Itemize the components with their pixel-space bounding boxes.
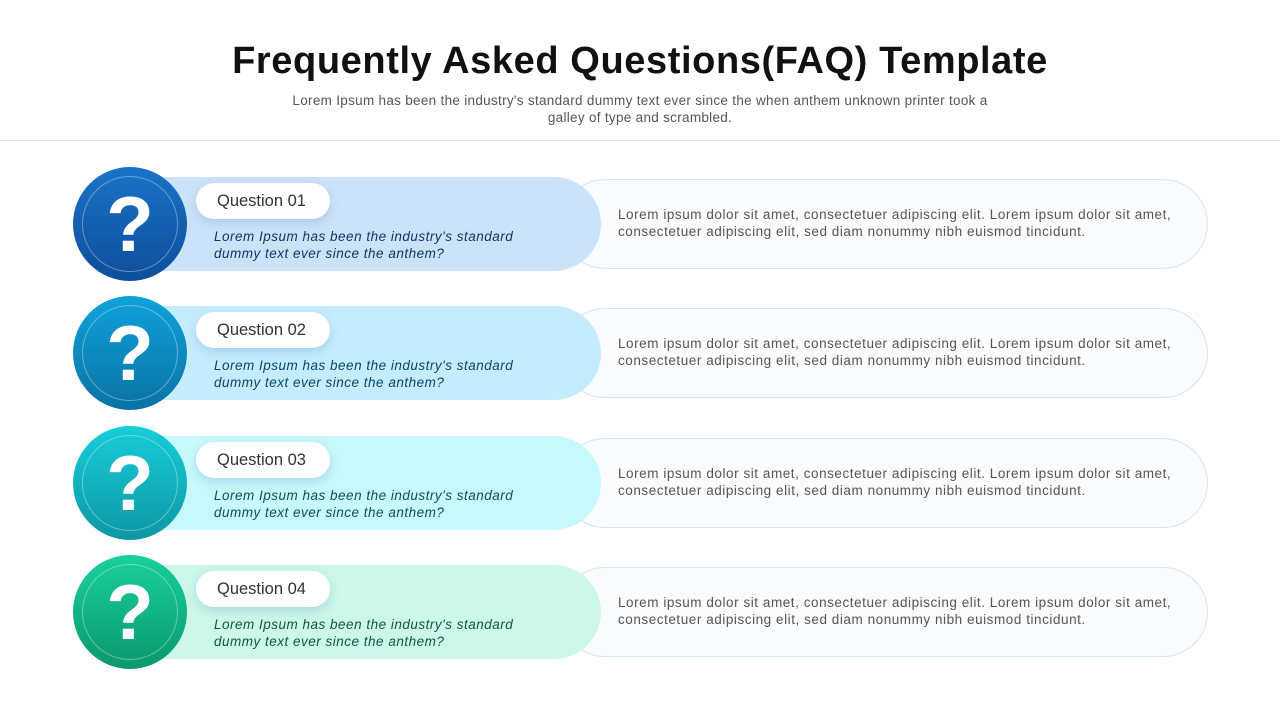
- icon: question circle 01: ?: [106, 180, 154, 268]
- chip: Question 02: Question 02: [217, 321, 306, 339]
- question text 02: [214, 358, 514, 390]
- answer panel 01: Lorem ipsum dolor sit amet, consectetuer adipiscing elit. Lorem ipsum dolor sit amet,: [618, 207, 1171, 222]
- question text 02: dummy text ever since the anthem?: [214, 375, 444, 390]
- chip: Question 04: Question 04: [217, 580, 306, 598]
- icon: question circle 04: ?: [106, 568, 154, 656]
- chip: Question 03: Question 03: [217, 451, 306, 469]
- question text 01: [214, 229, 514, 261]
- answer panel 01: consectetuer adipiscing elit, sed diam nonummy nibh euismod tincidunt.: [618, 224, 1086, 239]
- answer panel 04: consectetuer adipiscing elit, sed diam nonummy nibh euismod tincidunt.: [618, 612, 1086, 627]
- question text 03: [214, 488, 514, 520]
- chip: Question 01: [196, 183, 330, 219]
- question text 04: [214, 617, 514, 649]
- title: Frequently Asked Questions(FAQ) Template: [232, 40, 1048, 82]
- chip: Question 04: [196, 571, 330, 607]
- answer panel 02: consectetuer adipiscing elit, sed diam nonummy nibh euismod tincidunt.: [618, 353, 1086, 368]
- answer panel 03: Lorem ipsum dolor sit amet, consectetuer adipiscing elit. Lorem ipsum dolor sit amet,: [618, 466, 1171, 481]
- answer panel 02: [560, 308, 1208, 398]
- answer panel 04: Lorem ipsum dolor sit amet, consectetuer adipiscing elit. Lorem ipsum dolor sit amet,: [618, 595, 1171, 610]
- subtitle: Lorem Ipsum has been the industry's standard dummy text ever since the when anthem unknown printer took a: [292, 93, 988, 108]
- question panel 03: [130, 436, 601, 530]
- chip: Question 03: [196, 442, 330, 478]
- subtitle: galley of type and scrambled.: [548, 110, 732, 125]
- icon: question circle 03: ?: [106, 439, 154, 527]
- icon: question circle 03: [73, 426, 187, 540]
- answer panel 04: [560, 567, 1208, 657]
- chip: Question 01: Question 01: [217, 192, 306, 210]
- answer panel 03: [560, 438, 1208, 528]
- row: question 04: [73, 555, 1208, 669]
- row: question 02: [73, 296, 1208, 410]
- icon: question circle 02: ?: [106, 309, 154, 397]
- question text 01: Lorem Ipsum has been the industry's standard: [214, 229, 513, 244]
- answer panel 03: consectetuer adipiscing elit, sed diam nonummy nibh euismod tincidunt.: [618, 483, 1086, 498]
- question text 04: dummy text ever since the anthem?: [214, 634, 444, 649]
- question text 01: dummy text ever since the anthem?: [214, 246, 444, 261]
- question text 03: Lorem Ipsum has been the industry's standard: [214, 488, 513, 503]
- question text 02: Lorem Ipsum has been the industry's standard: [214, 358, 513, 373]
- icon: question circle 01: [73, 167, 187, 281]
- icon: question circle 04: [73, 555, 187, 669]
- question panel 04: [130, 565, 601, 659]
- answer panel 01: [560, 179, 1208, 269]
- question text 03: dummy text ever since the anthem?: [214, 505, 444, 520]
- row: question 03: [73, 426, 1208, 540]
- row: question 01: [73, 167, 1208, 281]
- answer panel 02: Lorem ipsum dolor sit amet, consectetuer adipiscing elit. Lorem ipsum dolor sit amet,: [618, 336, 1171, 351]
- question panel 02: [130, 306, 601, 400]
- question panel 01: [130, 177, 601, 271]
- icon: question circle 02: [73, 296, 187, 410]
- question text 04: Lorem Ipsum has been the industry's standard: [214, 617, 513, 632]
- chip: Question 02: [196, 312, 330, 348]
- subtitle: [292, 93, 988, 125]
